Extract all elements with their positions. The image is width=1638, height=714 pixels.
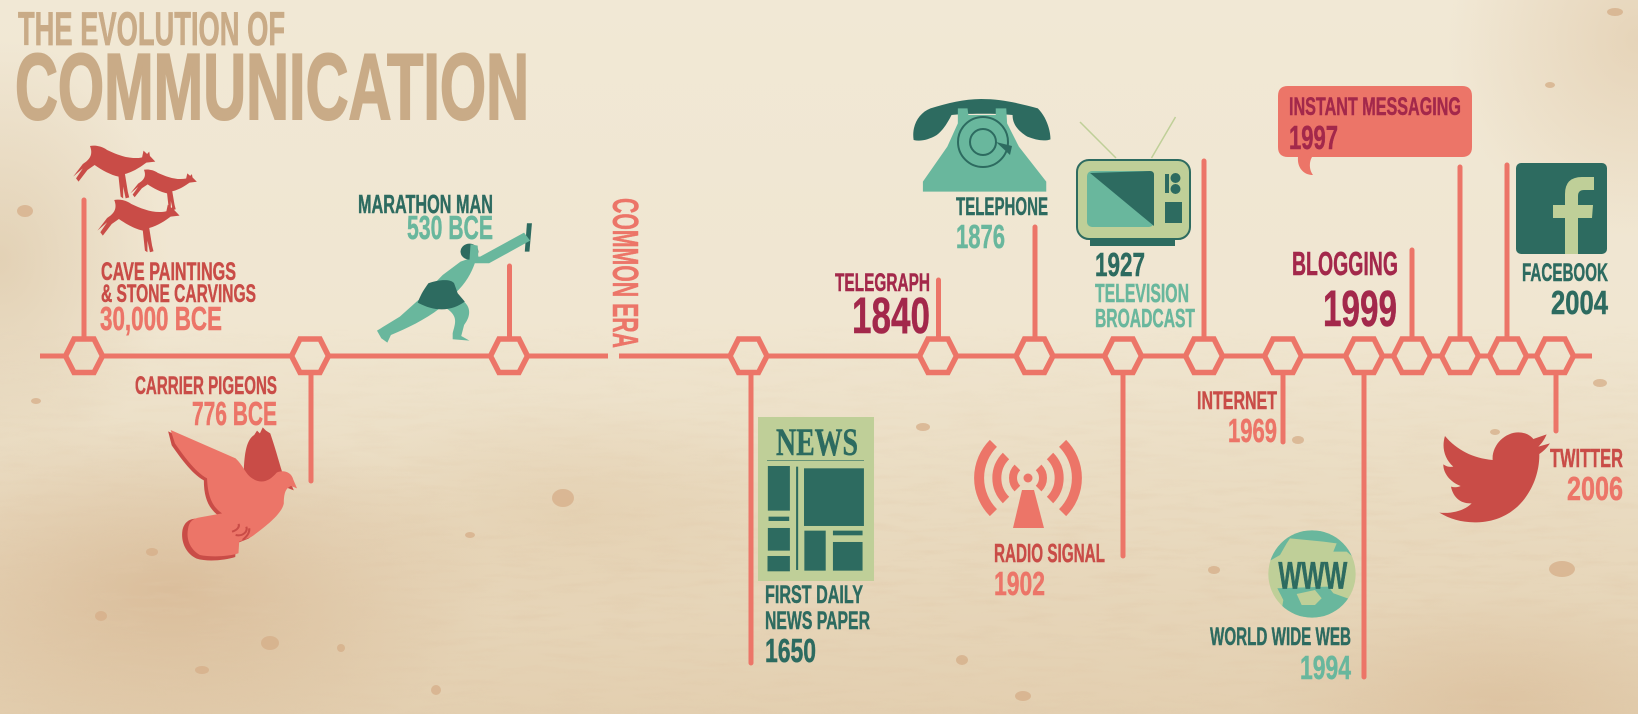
- text: cave paintings label: & STONE CARVINGS: [101, 280, 256, 308]
- text: cave paintings label: [100, 258, 256, 337]
- text: radio signal label: 1902: [994, 565, 1045, 602]
- timeline axis: [40, 161, 1592, 677]
- icon: twitter bird: [1439, 432, 1550, 522]
- icon: globe: WWW: [1278, 555, 1347, 597]
- icon: rotary telephone: [913, 99, 1050, 192]
- event: telegraph: 1840: [852, 287, 930, 344]
- event: world wide web: [1210, 527, 1357, 686]
- text: world wide web label: WORLD WIDE WEB: [1210, 623, 1351, 651]
- event: blogging: [1292, 245, 1398, 337]
- event: internet: INTERNET: [1197, 387, 1277, 415]
- text: marathon man label: MARATHON MAN: [358, 189, 493, 219]
- event: blogging: BLOGGING: [1292, 245, 1398, 282]
- text: instant messaging label: INSTANT MESSAGING: [1289, 93, 1461, 121]
- text: world wide web label: [1210, 623, 1351, 686]
- text: television label: [1095, 246, 1195, 333]
- event: television: [1077, 117, 1195, 333]
- event: blogging: 1999: [1323, 280, 1397, 337]
- title: COMMUNICATION: [15, 34, 529, 139]
- event: carrier pigeons: [135, 372, 297, 560]
- title: [15, 2, 529, 139]
- text: television label: 1927: [1095, 246, 1145, 283]
- icon: leaping deer: [73, 146, 197, 252]
- text: instant messaging label: 1997: [1289, 119, 1338, 156]
- title: THE EVOLUTION OF: [18, 2, 285, 55]
- text: radio signal label: [994, 538, 1105, 602]
- event: internet: [1197, 387, 1277, 449]
- text: instant messaging label: [1289, 93, 1461, 156]
- label: common era: COMMON ERA: [605, 198, 646, 348]
- text: newspaper label: 1650: [765, 632, 816, 669]
- text: telephone label: TELEPHONE: [956, 193, 1048, 221]
- text: carrier pigeons label: 776 BCE: [192, 395, 277, 432]
- event: telegraph: TELEGRAPH: [835, 269, 930, 297]
- icon: globe: [1268, 527, 1357, 620]
- icon: television: [1077, 117, 1190, 246]
- text: newspaper label: FIRST DAILY: [765, 581, 863, 609]
- icon: pigeon: [168, 427, 297, 560]
- speech bubble: [1278, 86, 1472, 175]
- text: carrier pigeons label: [135, 372, 277, 432]
- text: marathon man label: [358, 189, 493, 246]
- text: world wide web label: 1994: [1300, 649, 1351, 686]
- text: carrier pigeons label: CARRIER PIGEONS: [135, 372, 277, 400]
- event: first daily newspaper: [758, 417, 874, 669]
- text: radio signal label: RADIO SIGNAL: [994, 538, 1105, 568]
- icon: runner with baton: [377, 223, 532, 343]
- icon: facebook logo: [1516, 163, 1607, 254]
- icon: radio tower: [979, 443, 1077, 528]
- text: television label: BROADCAST: [1095, 303, 1195, 333]
- event: marathon man: [358, 189, 532, 343]
- text: television label: TELEVISION: [1095, 278, 1189, 308]
- text: facebook label: [1522, 259, 1608, 321]
- text: cave paintings label: CAVE PAINTINGS: [101, 258, 236, 286]
- event: telegraph: [835, 269, 930, 344]
- text: newspaper label: NEWS PAPER: [765, 607, 870, 635]
- event: twitter: [1439, 432, 1623, 522]
- icon: newspaper: NEWS: [776, 421, 858, 464]
- text: facebook label: 2004: [1551, 284, 1608, 321]
- text: twitter label: [1550, 443, 1623, 507]
- event: radio signal: [979, 443, 1105, 602]
- icon: newspaper: [758, 417, 874, 581]
- event: internet: 1969: [1228, 412, 1277, 449]
- text: cave paintings label: 30,000 BCE: [100, 300, 222, 337]
- event: instant messaging: [1278, 86, 1472, 175]
- text: newspaper label: [765, 581, 870, 669]
- event: facebook: [1516, 163, 1608, 321]
- text: telephone label: [956, 193, 1048, 255]
- event: telephone: [913, 99, 1050, 255]
- text: telephone label: 1876: [956, 218, 1005, 255]
- text: marathon man label: 530 BCE: [407, 209, 493, 246]
- event: cave paintings: [73, 146, 256, 337]
